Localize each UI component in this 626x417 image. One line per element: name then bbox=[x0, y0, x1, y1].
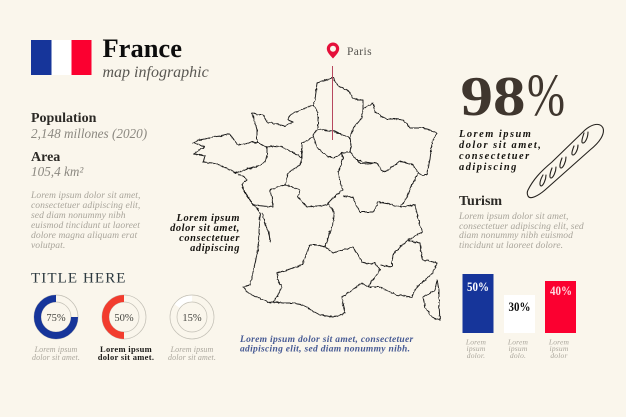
text block: left description: volutpat. bbox=[31, 240, 65, 251]
callout: map side text: dolor sit amet, bbox=[170, 223, 240, 234]
big statistic: 98% bbox=[460, 62, 565, 128]
donut caption: 75%: dolor sit amet. bbox=[32, 353, 80, 362]
population stat: Population bbox=[31, 111, 97, 126]
bar caption: 40%: ipsum bbox=[550, 344, 569, 353]
text block: statistic description: consectetuer bbox=[459, 151, 531, 162]
bar caption: 30%: Lorem bbox=[507, 338, 529, 346]
donut chart: 50%: 50% bbox=[114, 313, 134, 324]
population stat bbox=[31, 111, 147, 141]
text block: left description bbox=[30, 190, 140, 251]
text block: statistic description bbox=[458, 129, 542, 173]
text block: left description: Lorem ipsum dolor sit amet, bbox=[30, 190, 140, 201]
callout: map side text: adipiscing bbox=[190, 243, 240, 254]
bar caption: 50%: Lorem bbox=[465, 338, 487, 346]
donut chart: 75%: 75% bbox=[46, 313, 66, 324]
bar caption: 30% bbox=[507, 338, 529, 360]
title: map infographic bbox=[102, 64, 209, 81]
callout: map bottom text: Lorem ipsum dolor sit amet, consectetuer bbox=[239, 335, 414, 345]
donut chart: 15% bbox=[170, 295, 214, 339]
callout: region label line bbox=[332, 66, 334, 140]
bar caption: 40% bbox=[548, 338, 570, 360]
text block: statistic description: adipiscing bbox=[459, 162, 518, 173]
donut caption: 15%: dolor sit amet. bbox=[168, 353, 216, 362]
callout: map side text bbox=[170, 213, 240, 254]
population stat: 2,148 millones (2020) bbox=[31, 126, 147, 141]
heading: turism: Turism bbox=[459, 194, 502, 209]
map: France regions bbox=[193, 78, 440, 320]
donut caption: 50%: dolor sit amet. bbox=[98, 352, 154, 362]
donut chart: 15%: 15% bbox=[182, 313, 202, 324]
icon: baguette bbox=[527, 124, 603, 198]
text block: left description: euismod tincidunt ut laoreet bbox=[31, 220, 140, 231]
callout: map bottom text: adipiscing elit, sed diam nonummy nibh. bbox=[240, 344, 410, 354]
title: France bbox=[102, 33, 182, 63]
heading: title here: TITLE HERE bbox=[31, 270, 127, 286]
text block: turism description: tincidunt ut laoreet dolore. bbox=[459, 240, 563, 251]
callout: map side text: consectetuer bbox=[179, 233, 240, 244]
area stat: 105,4 km² bbox=[31, 164, 84, 179]
bar caption: 40%: Lorem bbox=[548, 338, 570, 346]
area stat: Area bbox=[31, 150, 60, 165]
bar caption: 30%: ipsum bbox=[509, 344, 528, 353]
donut caption: 75%: Lorem ipsum bbox=[34, 345, 78, 354]
title bbox=[102, 33, 209, 81]
bar chart: 30% bbox=[508, 299, 530, 314]
text block: left description: sed diam nonummy nibh bbox=[31, 210, 126, 221]
text block: statistic description: Lorem ipsum bbox=[458, 129, 532, 140]
donut caption: 50%: Lorem ipsum bbox=[100, 344, 152, 354]
bar caption: 50%: ipsum bbox=[467, 344, 486, 353]
callout: map side text: Lorem ipsum bbox=[176, 213, 240, 224]
bar chart: 50% bbox=[467, 279, 489, 294]
bar chart: 40% bbox=[550, 283, 572, 298]
icon: French flag bbox=[31, 40, 92, 75]
bar caption: 50%: dolor. bbox=[467, 351, 485, 360]
bar caption: 50% bbox=[465, 338, 487, 360]
text block: turism description bbox=[458, 211, 584, 251]
text block: turism description: Lorem ipsum dolor sit amet, bbox=[458, 211, 568, 222]
donut caption: 15% bbox=[168, 345, 216, 362]
text block: left description: dolore magna aliquam erat bbox=[31, 230, 137, 241]
icon: location pin bbox=[327, 42, 339, 58]
text block: turism description: diam nonummy nibh euismod bbox=[459, 230, 573, 241]
donut caption: 50% bbox=[98, 344, 154, 362]
text block: left description: consectetuer adipiscing elit, bbox=[31, 200, 140, 211]
bar caption: 30%: dolo. bbox=[510, 351, 526, 360]
donut caption: 15%: Lorem ipsum bbox=[170, 345, 214, 354]
bar chart bbox=[462, 274, 576, 333]
donut caption: 75% bbox=[32, 345, 80, 362]
callout: map bottom text bbox=[239, 335, 414, 354]
donut chart: 75% bbox=[34, 295, 78, 339]
text block: turism description: consectetuer adipiscing elit, sed bbox=[459, 221, 584, 232]
bar caption: 40%: dolor bbox=[550, 351, 568, 360]
text block: statistic description: dolor sit amet, bbox=[459, 140, 542, 151]
area stat bbox=[31, 150, 84, 179]
big statistic: 98%: 98 bbox=[460, 66, 526, 128]
label: Paris: Paris bbox=[347, 46, 372, 58]
donut chart: 50% bbox=[102, 295, 146, 339]
big statistic: 98%: % bbox=[527, 62, 565, 128]
